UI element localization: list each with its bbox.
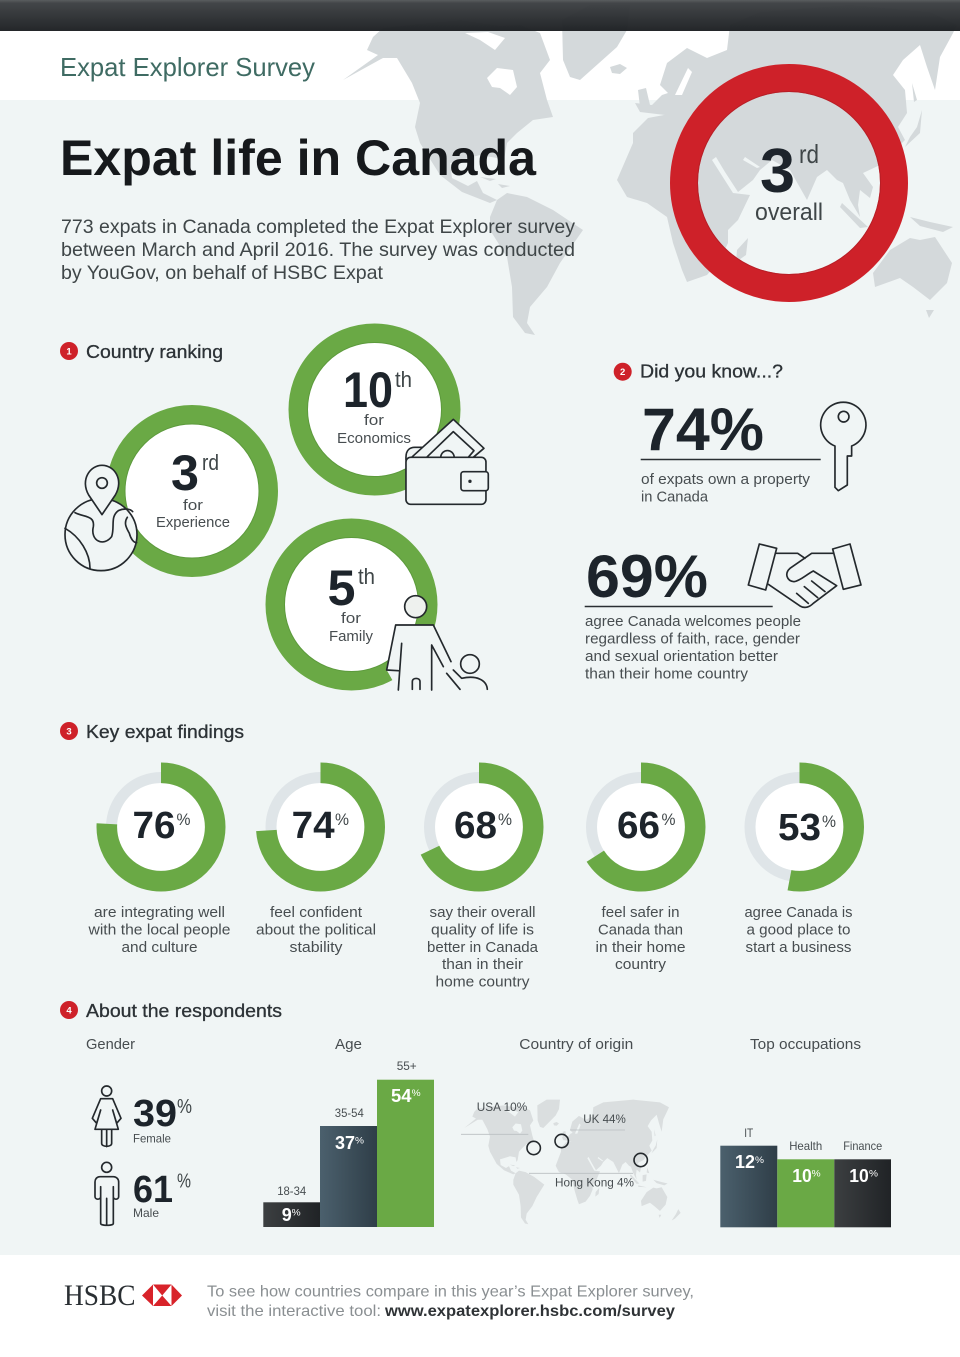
finding: 74%: % xyxy=(335,810,349,829)
finding: 76%: are integrating well xyxy=(94,905,225,921)
chart: age bars xyxy=(263,1036,434,1227)
stat: 74% own property: in Canada xyxy=(641,488,709,506)
chart: top occupations: % xyxy=(812,1168,821,1178)
HSBC wordmark: HSBC xyxy=(64,1279,136,1312)
icon: handshake xyxy=(748,544,861,607)
ring: 3rd for experience: 3 xyxy=(171,445,199,501)
finding: 66%: Canada than xyxy=(598,922,683,938)
chart: top occupations xyxy=(720,1036,891,1227)
survey name: Expat Explorer Survey xyxy=(60,52,315,82)
finding: 53%: agree Canada is xyxy=(744,905,852,921)
finding: 66%: country xyxy=(615,957,667,973)
ring: 5th for family: Family xyxy=(329,628,373,645)
finding: 66%: % xyxy=(662,810,676,829)
stat: 69% welcomes: 69% xyxy=(586,543,708,610)
ring: 5th for family: 5 xyxy=(328,560,356,616)
finding: 68%: quality of life is xyxy=(431,922,534,938)
heading: about the respondents: 4 xyxy=(66,1006,72,1016)
stat: 74% own property: 74% xyxy=(642,396,764,463)
finding: 74%: feel confident xyxy=(270,905,362,921)
finding: 66% xyxy=(587,773,695,973)
chart: top occupations: Health xyxy=(789,1139,822,1153)
finding: 53%: start a business xyxy=(746,940,852,956)
icon: wallet xyxy=(406,419,488,504)
stat: 69% welcomes: than their home country xyxy=(585,666,749,682)
icon: female figure xyxy=(92,1086,121,1147)
heading: country ranking: 1 xyxy=(66,346,72,358)
stat: 69% welcomes: and sexual orientation better xyxy=(585,648,778,665)
chart: age bars: 18-34 xyxy=(277,1184,306,1198)
finding: 68%: 68 xyxy=(454,805,497,847)
chart: top occupations: IT xyxy=(744,1126,754,1140)
map: country of origin: UK 44% xyxy=(583,1112,626,1126)
chart: top occupations: 10 xyxy=(792,1166,812,1186)
icon: key xyxy=(821,402,866,491)
overall ranking ring: 3 xyxy=(760,137,795,206)
finding: 68%: % xyxy=(498,810,512,829)
chart: top occupations: 12 xyxy=(735,1152,755,1172)
call to action: www.expatexplorer.hsbc.com/survey xyxy=(384,1303,675,1320)
overall ranking ring: rd xyxy=(799,139,819,169)
map: country of origin: Hong Kong 4% xyxy=(555,1176,634,1190)
chart: age bars: 55+ xyxy=(397,1059,417,1073)
finding: 68%: home country xyxy=(436,974,530,990)
intro text: by YouGov, on behalf of HSBC Expat xyxy=(61,262,384,284)
overall ranking ring xyxy=(684,78,894,288)
stat: 69% welcomes xyxy=(585,543,801,682)
background world map xyxy=(343,5,960,335)
map: country of origin: Country of origin xyxy=(519,1036,633,1053)
finding: 68%: better in Canada xyxy=(427,940,539,956)
chart: age bars: Age xyxy=(335,1036,362,1053)
heading: about the respondents: About the respondents xyxy=(86,1001,282,1021)
panel: gender: Gender xyxy=(86,1036,135,1053)
chart: age bars: 54 xyxy=(391,1086,412,1106)
section 3: key expat findings xyxy=(60,722,854,990)
finding: 68%: say their overall xyxy=(430,905,536,921)
finding: 53%: 53 xyxy=(778,807,821,849)
chart: top occupations: % xyxy=(755,1155,764,1165)
chart: age bars: 9 xyxy=(282,1205,292,1225)
finding: 76% xyxy=(87,773,231,956)
stat: 69% welcomes: agree Canada welcomes people xyxy=(585,613,801,630)
panel: gender xyxy=(86,1036,192,1225)
chart: top occupations: Finance xyxy=(843,1139,882,1153)
finding: 74% xyxy=(256,773,376,956)
ring: 10th for economics: 10 xyxy=(343,362,393,418)
ring: 5th for family: for xyxy=(341,610,361,627)
title: Expat life in Canada xyxy=(60,130,537,186)
top dark bar xyxy=(0,0,960,31)
call to action: visit the interactive tool: xyxy=(207,1303,381,1320)
panel: gender: % xyxy=(177,1170,191,1192)
heading: did you know: 2 xyxy=(620,367,625,378)
ring: 5th for family xyxy=(275,528,428,681)
finding: 74%: stability xyxy=(290,940,343,956)
panel: gender: Female xyxy=(133,1132,171,1146)
finding: 66%: 66 xyxy=(617,805,660,847)
finding: 53% xyxy=(744,773,854,956)
intro text xyxy=(61,216,575,284)
chart: age bars: % xyxy=(412,1088,421,1098)
intro text: between March and April 2016. The survey was conducted xyxy=(61,239,575,261)
call to action: To see how countries compare in this year’s Expat Explorer survey, xyxy=(207,1284,694,1301)
finding: 76%: % xyxy=(176,810,190,829)
overall ranking ring: overall xyxy=(755,199,823,226)
chart: age bars: 35-54 xyxy=(335,1106,364,1120)
heading: key expat findings: 3 xyxy=(66,726,72,738)
finding: 76%: and culture xyxy=(122,940,198,956)
ring: 5th for family: th xyxy=(358,564,375,589)
ring: 10th for economics: for xyxy=(364,412,384,429)
footer xyxy=(64,1279,694,1320)
map: country of origin: USA 10% xyxy=(477,1100,528,1114)
finding: 76%: with the local people xyxy=(87,922,231,938)
HSBC hexagon logo xyxy=(142,1284,182,1306)
chart: top occupations: % xyxy=(869,1168,878,1178)
ring: 3rd for experience: rd xyxy=(202,450,219,475)
ring: 3rd for experience: for xyxy=(183,497,203,514)
finding: 76%: 76 xyxy=(132,805,176,847)
stat: 69% welcomes: regardless of faith, race, gender xyxy=(585,630,800,648)
stat: 74% own property: of expats own a property xyxy=(641,471,811,488)
finding: 68%: than in their xyxy=(442,957,523,973)
ring: 3rd for experience xyxy=(116,414,268,568)
section 4: about the respondents xyxy=(60,1001,891,1227)
chart: top occupations: Top occupations xyxy=(750,1036,861,1053)
chart: top occupations: 10 xyxy=(849,1166,869,1186)
panel: gender: Male xyxy=(133,1206,159,1220)
icon: male figure xyxy=(95,1162,119,1225)
section 1: country ranking xyxy=(60,333,488,691)
finding: 68% xyxy=(425,773,539,990)
chart: age bars: % xyxy=(292,1208,301,1218)
ring: 10th for economics xyxy=(298,333,451,486)
chart: age bars: 37 xyxy=(335,1133,355,1153)
stat: 74% own property xyxy=(641,396,821,506)
finding: 74%: 74 xyxy=(292,805,335,847)
panel: gender: 39 xyxy=(133,1093,177,1135)
icon: globe with location pin xyxy=(65,465,137,571)
finding: 53%: % xyxy=(822,812,836,831)
intro text: 773 expats in Canada completed the Expat Explorer survey xyxy=(61,216,575,238)
heading: key expat findings: Key expat findings xyxy=(86,722,244,742)
panel: gender: 61 xyxy=(133,1169,173,1211)
ring: 3rd for experience: Experience xyxy=(156,514,230,531)
ring: 10th for economics: Economics xyxy=(337,430,411,447)
heading: did you know: Did you know...? xyxy=(640,362,783,382)
panel: gender: % xyxy=(177,1096,192,1118)
finding: 53%: a good place to xyxy=(746,922,850,938)
call to action xyxy=(207,1284,694,1320)
map: country of origin xyxy=(461,1036,681,1224)
finding: 66%: feel safer in xyxy=(602,905,680,921)
finding: 74%: about the political xyxy=(256,922,376,938)
chart: age bars: % xyxy=(355,1136,364,1146)
finding: 66%: in their home xyxy=(596,940,686,956)
section 2: did you know xyxy=(585,362,866,682)
ring: 10th for economics: th xyxy=(395,367,412,392)
icon: adult and child xyxy=(387,596,487,691)
heading: country ranking: Country ranking xyxy=(86,342,223,362)
